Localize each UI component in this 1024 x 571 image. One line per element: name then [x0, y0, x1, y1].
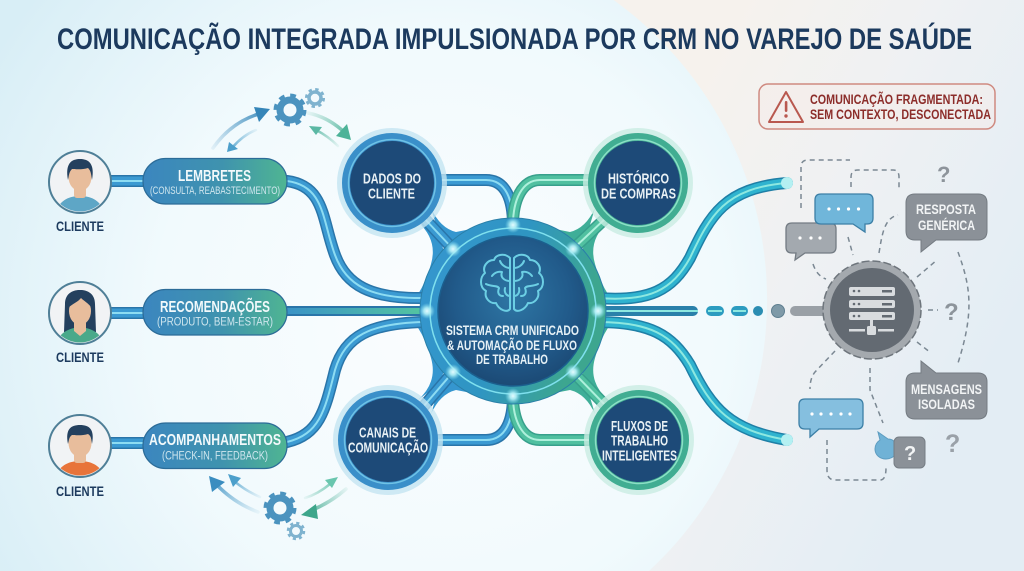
pill: lembretes: (CONSULTA, REABASTECIMENTO) — [150, 185, 280, 197]
icon: small gear bottom — [288, 523, 304, 539]
client 1 — [49, 151, 111, 234]
pill: acompanhamentos — [143, 423, 287, 468]
hub label: SISTEMA CRM UNIFICADO — [446, 322, 579, 338]
label: cliente 1: CLIENTE — [56, 219, 104, 234]
icon: small gear top — [306, 89, 324, 107]
hub web fillets — [417, 208, 609, 414]
question mark middle: ? — [944, 299, 959, 326]
bubble: resposta generica: RESPOSTA — [916, 202, 976, 217]
pill: recomendacoes: (PRODUTO, BEM-ESTAR) — [157, 316, 273, 328]
avatar: client 3 — [49, 415, 111, 478]
pill: lembretes — [143, 158, 287, 204]
icon: large gear top — [276, 96, 304, 124]
hub core — [438, 236, 588, 386]
hub ring — [420, 218, 606, 404]
icon: server rack — [849, 287, 895, 335]
connector: middle line to hub — [287, 306, 698, 316]
node: dados do cliente: DADOS DO — [363, 170, 421, 188]
chat bubble: blue bottom — [799, 399, 863, 437]
bubble: mensagens isoladas: MENSAGENS — [911, 382, 982, 397]
chat bubble: blue top — [815, 194, 873, 232]
pill: recomendacoes: RECOMENDAÇÕES — [160, 298, 270, 316]
pill: acompanhamentos: (CHECK-IN, FEEDBACK) — [162, 450, 268, 462]
dashed disconnected lines — [801, 160, 969, 480]
node: historico de compras: DE COMPRAS — [601, 186, 676, 202]
icon: bottom gears and arrows — [209, 474, 346, 539]
central hub — [419, 217, 606, 404]
node: fluxos de trabalho inteligentes: FLUXOS DE — [611, 418, 668, 435]
arrows bottom — [209, 474, 346, 519]
icon: top gears and arrows — [213, 89, 351, 152]
bubble: resposta generica — [906, 194, 987, 252]
server circle — [823, 261, 921, 359]
pill: recomendacoes — [143, 290, 287, 335]
node: fluxos de trabalho inteligentes: TRABALHO — [611, 432, 668, 450]
icon: large gear bottom — [266, 494, 294, 522]
hub nodes — [419, 217, 606, 404]
warning text — [810, 90, 991, 122]
warning callout — [759, 84, 995, 129]
node: fluxos de trabalho inteligentes — [584, 385, 694, 495]
icon: drop bubble with question — [875, 432, 925, 468]
icon: brain — [481, 255, 543, 311]
label: cliente 3: CLIENTE — [56, 484, 104, 499]
connector pipes: right teal — [598, 177, 793, 446]
broken connection dashes — [706, 304, 830, 318]
node: historico de compras — [583, 128, 693, 238]
label: cliente 2: CLIENTE — [56, 350, 104, 365]
node: canais de comunicacao: CANAIS DE — [359, 424, 416, 442]
client 3 — [49, 415, 111, 499]
hub label — [446, 322, 579, 367]
connector pipes: green — [513, 180, 607, 440]
hub label: & AUTOMAÇÃO DE FLUXO — [447, 336, 577, 353]
pill: lembretes: LEMBRETES — [178, 168, 251, 185]
node: fluxos de trabalho inteligentes: INTELIGENTES — [602, 448, 677, 464]
node: canais de comunicacao — [333, 385, 443, 495]
node: canais de comunicacao: COMUNICAÇÃO — [348, 438, 428, 456]
icon: drop bubble with question: ? — [904, 443, 916, 465]
connector pipes: blue — [110, 180, 513, 443]
avatar: client 2 — [49, 282, 111, 346]
chat bubble: gray — [786, 223, 836, 260]
arrows top — [213, 107, 351, 152]
question mark bottom: ? — [945, 430, 960, 458]
bubble: mensagens isoladas: ISOLADAS — [918, 397, 975, 412]
avatar: client 1 — [49, 151, 111, 214]
pill: acompanhamentos: ACOMPANHAMENTOS — [149, 432, 281, 449]
bubble: mensagens isoladas — [906, 361, 987, 419]
client 2 — [49, 282, 111, 365]
node: dados do cliente — [337, 128, 447, 238]
bubble: resposta generica: GENÉRICA — [918, 218, 975, 233]
node: historico de compras: HISTÓRICO — [608, 170, 669, 188]
node: dados do cliente: CLIENTE — [368, 186, 415, 202]
icon: warning triangle — [769, 92, 803, 122]
hub label: DE TRABALHO — [476, 351, 548, 367]
question mark top: ? — [937, 162, 950, 187]
